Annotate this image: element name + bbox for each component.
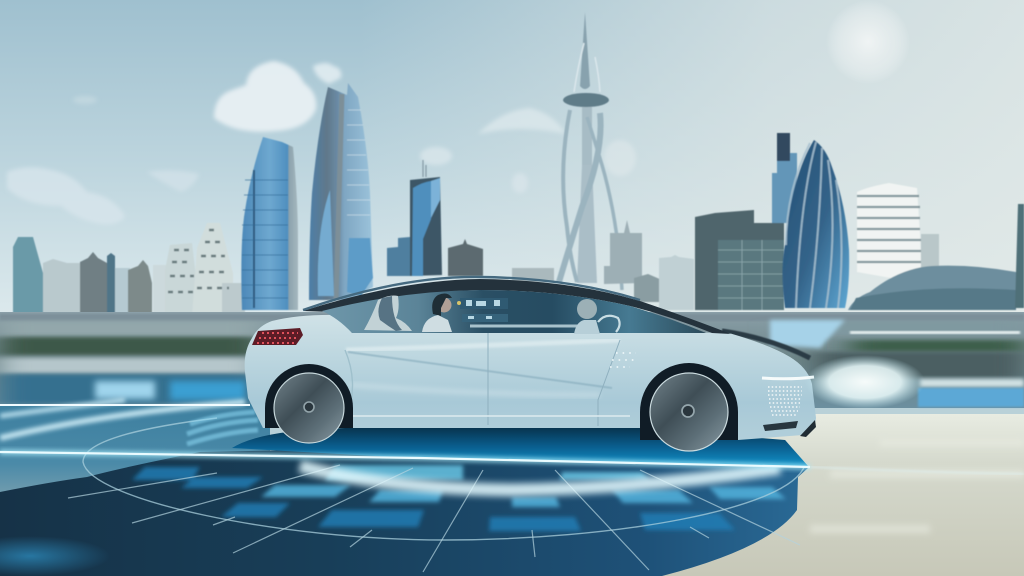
body panels and door seams	[345, 333, 630, 426]
beige streaks	[810, 440, 1024, 533]
rear passenger	[422, 294, 452, 332]
ground plane: right beige area	[600, 414, 1024, 576]
car body	[245, 315, 816, 440]
sensor grid lines	[68, 465, 800, 572]
front grille dots	[768, 387, 802, 415]
tail light	[252, 328, 303, 345]
sun glow	[826, 0, 910, 84]
steering wheel	[598, 316, 620, 332]
far side of the hood	[722, 331, 810, 358]
skyline: mid towers	[387, 160, 554, 282]
car	[245, 277, 816, 451]
headlight bar	[762, 377, 814, 379]
blue edge line at right	[815, 410, 1024, 414]
seat	[364, 296, 412, 331]
skyline: right towers	[604, 133, 797, 310]
front passenger	[574, 299, 600, 334]
skyline: spire tower	[559, 12, 622, 290]
bright horizontal light line	[0, 452, 1024, 474]
skyline: white cylinder tower and dome	[848, 183, 1024, 310]
light streaks	[0, 400, 780, 490]
ground plane: left blue area	[0, 404, 270, 504]
shadow lower-left glow	[0, 536, 110, 576]
glow under the car	[232, 428, 808, 466]
headlight beam glow	[805, 355, 925, 409]
skyline: gherkin tower	[782, 140, 849, 308]
bumper vent and lip	[763, 420, 816, 437]
side dot vent	[610, 353, 636, 367]
blue road tiles	[132, 465, 786, 531]
windows	[322, 290, 706, 333]
skyline: distant left towers	[13, 223, 245, 316]
motion-blurred road band	[0, 312, 1024, 408]
sky background	[0, 0, 1024, 330]
skyline: glass tower one	[241, 137, 298, 310]
sensor scan ring	[83, 418, 805, 540]
car roof and glasshouse	[303, 279, 731, 334]
front wheel	[640, 363, 738, 451]
dashboard screens	[457, 298, 508, 322]
clouds	[7, 61, 636, 224]
rear wheel	[265, 364, 353, 443]
interior sill reflection	[470, 324, 590, 328]
skyline: twin glass tower	[309, 83, 373, 300]
main ground shadow	[0, 440, 808, 576]
